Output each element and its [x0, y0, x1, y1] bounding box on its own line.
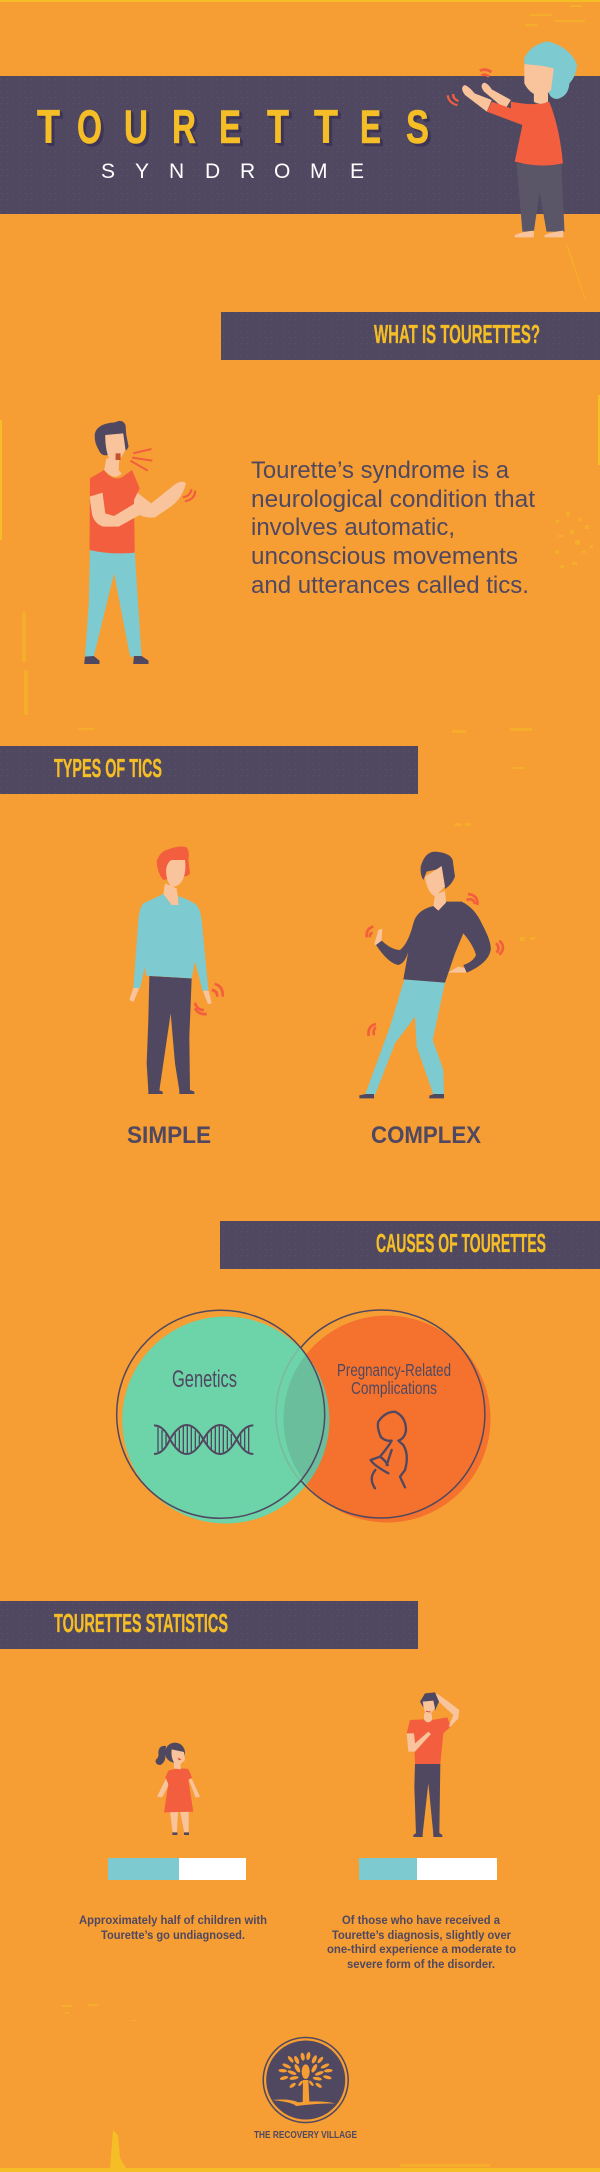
tic marks [367, 894, 503, 1036]
hair [421, 852, 455, 889]
caption: moderate to severe: severe form of the disorder. [347, 1959, 495, 1971]
tic marks [183, 489, 195, 501]
subtitle: SYNDROME: SYNDROME [101, 160, 364, 183]
section bar: tourettes statistics: TOURETTES STATISTICS [54, 1608, 228, 1638]
label: genetics: Genetics [172, 1366, 237, 1393]
section bar: types of tics [0, 746, 418, 794]
caption: moderate to severe: Tourette’s diagnosis, slightly over [332, 1930, 511, 1942]
caption: moderate to severe [327, 1915, 516, 1971]
label: simple: SIMPLE [127, 1122, 211, 1149]
title: TOURETTES: T [267, 100, 289, 153]
shoes [359, 1094, 444, 1098]
paragraph: Tourette’s syndrome is a [251, 457, 510, 484]
title: TOURETTES: O [77, 100, 102, 153]
face [423, 1701, 435, 1715]
trousers [365, 979, 445, 1096]
trousers [414, 1764, 440, 1834]
shirt [407, 1717, 451, 1764]
neck [433, 891, 446, 911]
arms [157, 1777, 200, 1798]
label: pregnancy-related complications: Complications [351, 1378, 437, 1398]
neck [424, 1713, 432, 1723]
title: TOURETTES: R [172, 100, 196, 153]
shoes [413, 1833, 442, 1837]
ponytail [156, 1746, 166, 1765]
figure: simple tic person [129, 847, 223, 1094]
outline: right [300, 1310, 485, 1518]
far arm [482, 83, 511, 109]
figure: person shouting [84, 421, 195, 664]
hair [95, 421, 129, 455]
tic marks [480, 70, 491, 77]
logo wordmark: THE RECOVERY VILLAGE [254, 2130, 357, 2141]
shoes [172, 1832, 189, 1835]
figure: man scratching head [407, 1692, 459, 1837]
title: TOURETTES: E [360, 100, 381, 153]
caption: moderate to severe: Of those who have received a [342, 1915, 501, 1927]
feet [515, 231, 563, 237]
mouth [178, 1758, 182, 1760]
face [425, 866, 445, 897]
mouth [116, 453, 121, 460]
hands [374, 929, 467, 973]
tree [272, 2052, 335, 2106]
mouth [426, 1710, 431, 1713]
hands [129, 988, 212, 1004]
faint overlap arc [275, 1348, 305, 1487]
shirt [487, 102, 563, 165]
paragraph: involves automatic, [251, 514, 455, 541]
face [166, 860, 185, 887]
right arm [435, 1693, 459, 1727]
title: TOURETTES [37, 100, 429, 153]
section bar: types of tics: TYPES OF TICS [54, 753, 162, 783]
far arm [134, 482, 186, 518]
caption: children undiagnosed: Approximately half of children with [79, 1915, 267, 1927]
header band [0, 76, 600, 214]
outline: left [117, 1310, 325, 1518]
hair [165, 1743, 185, 1763]
hair [524, 41, 577, 99]
venn diagram [117, 1310, 490, 1524]
stat bar: one third [359, 1858, 497, 1880]
face [524, 64, 554, 97]
figure: complex tic person [359, 852, 503, 1098]
trousers [85, 550, 142, 657]
label: complex: COMPLEX [371, 1122, 481, 1149]
label: pregnancy-related complications: Pregnancy-Related [337, 1360, 451, 1380]
neck [534, 93, 548, 104]
caption: children undiagnosed [79, 1915, 267, 1942]
section bar: what is tourettes [221, 312, 600, 360]
legs [170, 1812, 189, 1833]
face [105, 433, 126, 462]
neck [104, 458, 122, 477]
figure: header person with hand tics [448, 41, 577, 237]
paragraph [251, 457, 535, 599]
hair [420, 1692, 439, 1711]
caption: children undiagnosed: Tourette’s go undiagnosed. [101, 1930, 245, 1942]
left arm [407, 1732, 431, 1752]
shout lines [131, 449, 152, 471]
dress [164, 1768, 193, 1812]
paragraph: and utterances called tics. [251, 572, 529, 599]
shirt [90, 470, 140, 553]
logo: the recovery village [254, 2038, 357, 2141]
icon: DNA [154, 1425, 253, 1454]
section bar: causes of tourettes [220, 1221, 600, 1269]
neck and face [171, 1749, 185, 1769]
neck [163, 883, 178, 905]
label: pregnancy-related complications [337, 1360, 451, 1398]
near arm [462, 85, 492, 112]
stat bar: half [108, 1858, 246, 1880]
title: TOURETTES: S [406, 100, 429, 153]
sweater [133, 894, 208, 991]
title: TOURETTES: T [37, 100, 60, 153]
title: TOURETTES: T [314, 100, 338, 153]
circle: genetics [122, 1316, 329, 1524]
circle: pregnancy-related complications [284, 1316, 490, 1522]
caption: moderate to severe: one-third experience a moderate to [327, 1944, 516, 1956]
near arm [90, 493, 152, 527]
trousers [147, 976, 192, 1091]
paragraph: unconscious movements [251, 543, 518, 570]
shoes [148, 1090, 194, 1094]
icon: pregnant woman [371, 1412, 407, 1488]
hair [157, 847, 190, 880]
tic marks [195, 984, 223, 1014]
title: TOURETTES: E [219, 100, 241, 153]
title: TOURETTES: U [124, 100, 148, 153]
shoes [84, 656, 148, 664]
sweater [376, 902, 491, 983]
figure: girl [156, 1743, 200, 1835]
section bar: tourettes statistics [0, 1601, 418, 1649]
pants [517, 164, 564, 232]
overlap [284, 1356, 330, 1484]
paragraph: neurological condition that [251, 486, 535, 513]
